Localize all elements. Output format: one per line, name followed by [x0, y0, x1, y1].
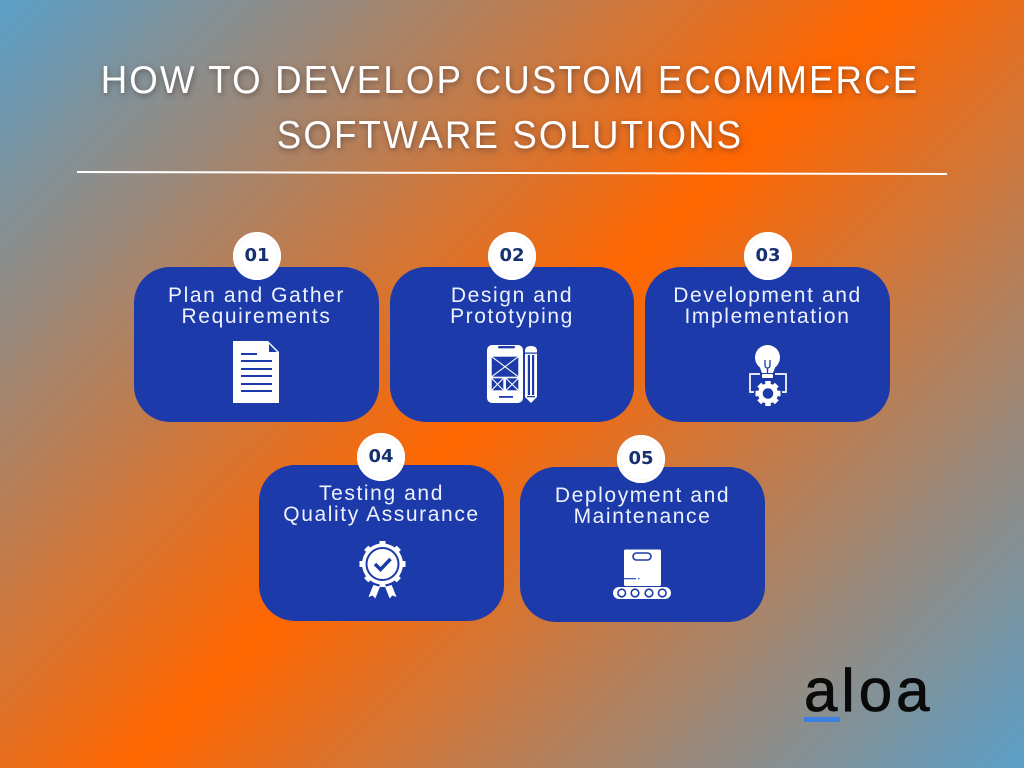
- icon: quality badge: [360, 541, 406, 598]
- icon: light bulb and gear: [749, 345, 787, 406]
- title: SOFTWARE SOLUTIONS: [277, 114, 743, 157]
- badge 04: [357, 433, 405, 481]
- badge 05: [617, 435, 665, 483]
- panel: step 04: [259, 465, 504, 621]
- step 01 label: Plan and Gather: [168, 284, 345, 307]
- step 02 label: [450, 284, 574, 328]
- badge 02: [488, 232, 536, 280]
- badge 05: 05: [628, 448, 654, 469]
- panel: step 02: [390, 267, 634, 422]
- icon: phone wireframe and pencil: [487, 345, 537, 403]
- title: [101, 59, 919, 157]
- title: HOW TO DEVELOP CUSTOM ECOMMERCE: [101, 59, 919, 102]
- step 05 label: [555, 484, 730, 528]
- icon: document: [233, 341, 279, 403]
- step 05 label: Deployment and: [555, 484, 730, 507]
- badge 01: 01: [244, 245, 270, 266]
- panel: step 03: [645, 267, 890, 422]
- panel: step 01: [134, 267, 379, 422]
- step 05 label: Maintenance: [574, 505, 711, 528]
- step 01 label: [168, 284, 345, 328]
- step 04 label: [283, 482, 480, 526]
- logo: aloa: aloa: [804, 657, 933, 724]
- step 03 label: Implementation: [684, 305, 850, 328]
- step 03 label: Development and: [673, 284, 862, 307]
- step 02 label: Prototyping: [450, 305, 574, 328]
- badge 03: 03: [755, 245, 781, 266]
- badge 03: [744, 232, 792, 280]
- badge 02: 02: [499, 245, 525, 266]
- badge 01: [233, 232, 281, 280]
- step 04 label: Testing and: [319, 482, 444, 505]
- step 04 label: Quality Assurance: [283, 503, 480, 526]
- badge 04: 04: [368, 446, 394, 467]
- step 02 label: Design and: [451, 284, 573, 307]
- panel: step 05: [520, 467, 765, 622]
- step 03 label: [673, 284, 862, 328]
- icon: box on conveyor: [613, 550, 671, 599]
- step 01 label: Requirements: [182, 305, 331, 328]
